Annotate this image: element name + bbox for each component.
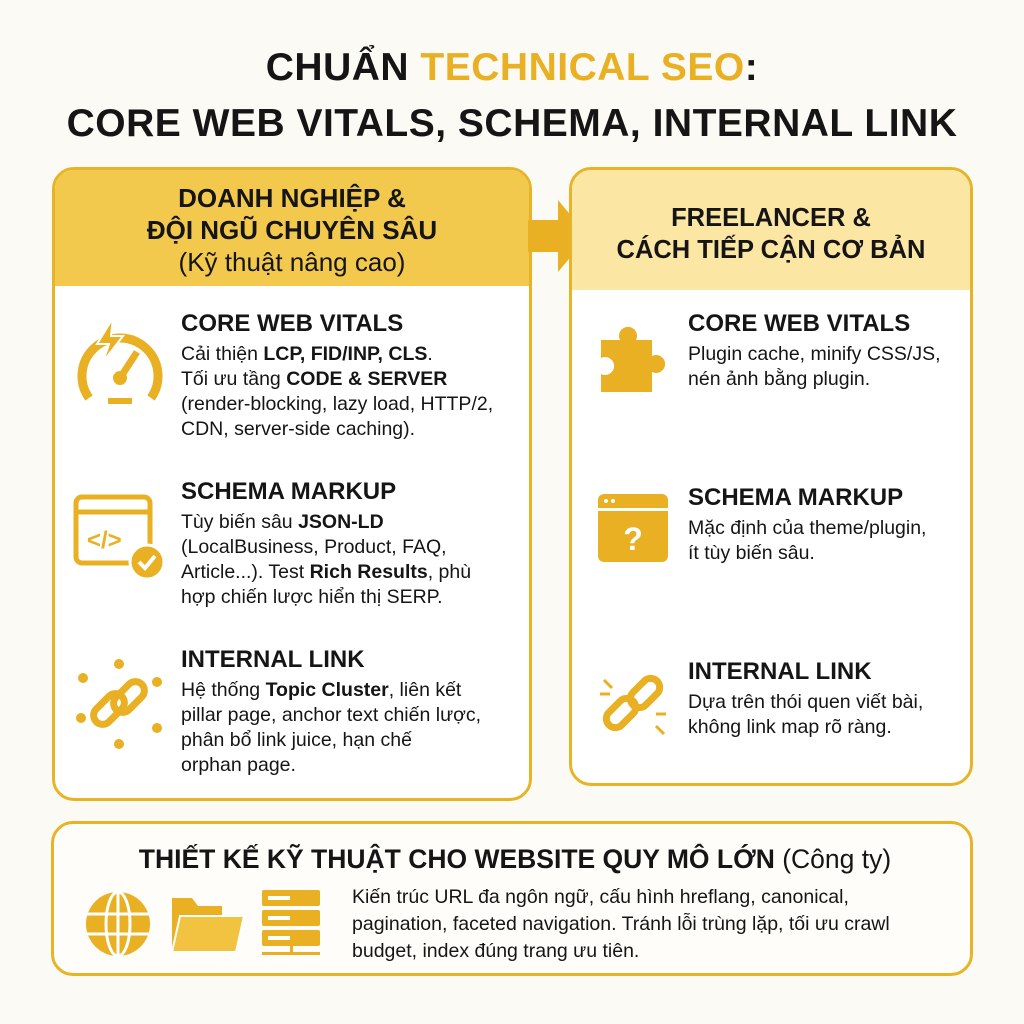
item: schema basic: ít tùy biến sâu. [688, 542, 815, 564]
item: core web vitals [181, 310, 493, 440]
panel: enterprise [52, 167, 532, 801]
item: internal link: phân bổ link juice, hạn chế [181, 729, 412, 751]
title: CHUẨN TECHNICAL SEO: [266, 46, 758, 89]
text block: budget, index đúng trang ưu tiên. [352, 940, 639, 962]
item: core web vitals: CDN, server-side caching). [181, 418, 415, 440]
item: schema basic [688, 484, 926, 564]
item: core web vitals basic: CORE WEB VITALS [688, 310, 910, 337]
item: internal link basic: không link map rõ ràng. [688, 716, 892, 738]
panel: freelancer [569, 167, 973, 786]
item: core web vitals: CORE WEB VITALS [181, 310, 403, 337]
item: core web vitals basic [688, 310, 941, 390]
item: internal link [181, 646, 481, 776]
item: schema markup: Article...). Test Rich Results, phù [181, 561, 471, 583]
icons: globe, folder, server [86, 890, 320, 956]
panel header: enterprise: DOANH NGHIỆP & [178, 183, 406, 213]
item: schema markup: hợp chiến lược hiển thị SERP. [181, 586, 443, 608]
panel: large website [51, 821, 973, 976]
icon: question window: ? [623, 521, 643, 557]
item: internal link basic: INTERNAL LINK [688, 658, 872, 685]
icon: broken link [600, 674, 666, 735]
panel heading: THIẾT KẾ KỸ THUẬT CHO WEBSITE QUY MÔ LỚN (Công ty) [139, 844, 891, 874]
panel header: freelancer: CÁCH TIẾP CẬN CƠ BẢN [617, 236, 925, 264]
item: core web vitals basic: Plugin cache, minify CSS/JS, [688, 343, 941, 365]
item: internal link: orphan page. [181, 754, 296, 776]
text block [352, 886, 890, 962]
panel header: freelancer [572, 170, 970, 290]
item: core web vitals basic: nén ảnh bằng plugin. [688, 368, 870, 390]
item: schema basic: Mặc định của theme/plugin, [688, 517, 926, 539]
item: internal link: Hệ thống Topic Cluster, liên kết [181, 679, 461, 701]
panel header: enterprise [55, 170, 529, 286]
icon: code window: </> [87, 527, 122, 554]
icon: code window [74, 494, 162, 578]
item: internal link: INTERNAL LINK [181, 646, 365, 673]
panel header: freelancer: FREELANCER & [671, 204, 871, 232]
icon: puzzle [601, 326, 666, 392]
panel header: enterprise: ĐỘI NGŨ CHUYÊN SÂU [147, 215, 437, 245]
icon: speedometer [77, 322, 162, 404]
arrow [528, 200, 569, 272]
item: core web vitals: (render-blocking, lazy load, HTTP/2, [181, 393, 493, 415]
item: internal link basic [688, 658, 923, 738]
item: schema markup: SCHEMA MARKUP [181, 478, 396, 505]
item: schema markup [181, 478, 471, 608]
icon: question window [598, 494, 668, 562]
item: internal link: pillar page, anchor text chiến lược, [181, 704, 481, 726]
item: core web vitals: Cải thiện LCP, FID/INP, CLS. [181, 343, 433, 365]
item: internal link basic: Dựa trên thói quen viết bài, [688, 691, 923, 713]
panel header: enterprise: (Kỹ thuật nâng cao) [179, 247, 405, 277]
item: schema markup: Tùy biến sâu JSON-LD [181, 511, 384, 533]
title: CORE WEB VITALS, SCHEMA, INTERNAL LINK [67, 102, 957, 145]
icon: network chain [76, 659, 162, 749]
item: schema markup: (LocalBusiness, Product, FAQ, [181, 536, 447, 558]
text block: pagination, faceted navigation. Tránh lỗi trùng lặp, tối ưu crawl [352, 913, 890, 935]
item: core web vitals: Tối ưu tầng CODE & SERVER [181, 368, 447, 390]
title [67, 45, 957, 145]
text block: Kiến trúc URL đa ngôn ngữ, cấu hình hreflang, canonical, [352, 886, 849, 908]
item: schema basic: SCHEMA MARKUP [688, 484, 903, 511]
